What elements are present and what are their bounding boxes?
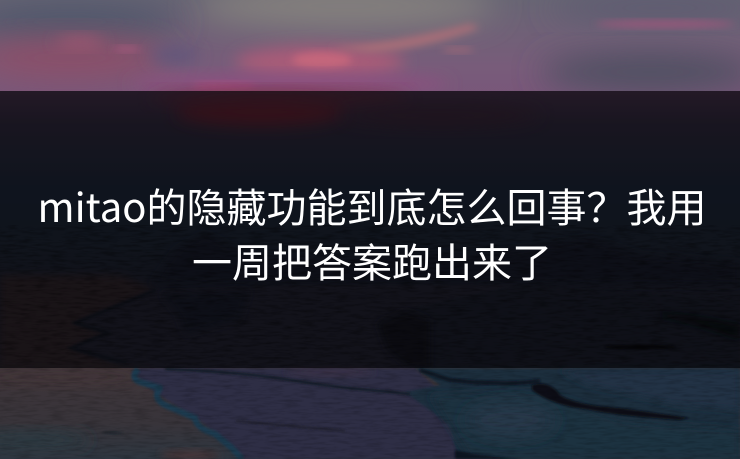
wet sand xyxy=(0,368,740,459)
dark overlay band xyxy=(0,91,740,368)
foam wave xyxy=(0,368,740,459)
sky xyxy=(0,0,740,91)
sea xyxy=(0,90,740,371)
title: mitao的隐藏功能到底怎么回事？我用 xyxy=(38,176,706,234)
title xyxy=(38,176,706,289)
title: 一周把答案跑出来了 xyxy=(192,231,552,289)
